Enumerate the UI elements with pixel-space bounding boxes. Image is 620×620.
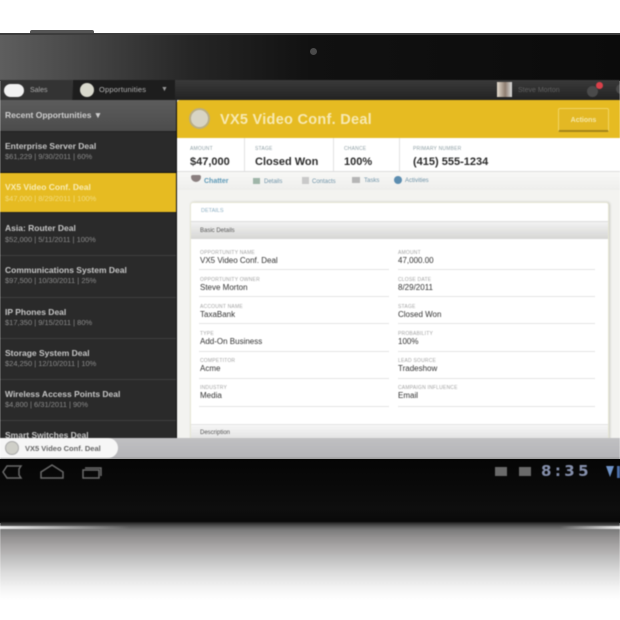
stat: amount	[190, 146, 230, 168]
icon: camera	[310, 48, 317, 55]
icon: settings	[616, 84, 620, 94]
icon: signal	[606, 465, 620, 479]
active tab	[0, 438, 118, 458]
section heading: Description	[200, 430, 230, 436]
item details: $61,229 | 9/30/2011 | 60%	[5, 152, 92, 161]
field: opportunity owner	[199, 273, 389, 297]
field label: OPPORTUNITY OWNER	[200, 277, 260, 283]
icon: activities	[394, 176, 402, 184]
field: industry	[199, 381, 389, 407]
icon: notification one	[495, 467, 507, 476]
field label: ACCOUNT NAME	[200, 304, 243, 310]
stat label: PRIMARY NUMBER	[413, 146, 461, 152]
basic details bar	[191, 221, 610, 239]
field label: PROBABILITY	[398, 331, 433, 337]
icon: back	[2, 464, 22, 480]
opportunities label: Opportunities	[99, 85, 146, 94]
main panel	[177, 100, 620, 439]
field value: 47,000.00	[398, 256, 434, 265]
field: amount	[398, 246, 595, 270]
actions button	[558, 108, 609, 132]
field: competitor	[199, 354, 389, 379]
icon: recent apps	[82, 466, 102, 480]
item: asia router	[4, 223, 96, 244]
item: communications system	[0, 255, 176, 297]
icon: chatter	[191, 175, 201, 182]
stats row	[177, 138, 620, 172]
field label: CLOSE DATE	[398, 277, 431, 283]
field value: 100%	[398, 337, 418, 346]
field value: Steve Morton	[200, 283, 248, 292]
stat: primary number	[399, 138, 519, 171]
item: smart switches	[0, 420, 176, 439]
icon: details	[253, 178, 260, 184]
field: account name	[199, 300, 389, 324]
field label: STAGE	[398, 304, 416, 310]
opportunities tab	[73, 80, 175, 100]
field value: Media	[200, 391, 222, 400]
field value: Tradeshow	[398, 364, 437, 373]
item details: $4,800 | 6/31/2011 | 90%	[5, 400, 88, 409]
item: wireless access points	[0, 379, 176, 420]
tab: details: Details	[264, 179, 282, 185]
dropdown arrow: ▼	[161, 86, 168, 93]
sidebar: opportunities list	[0, 100, 177, 439]
stat value: 100%	[344, 156, 372, 168]
item details: $24,250 | 12/10/2011 | 10%	[5, 359, 96, 368]
user name: Steve Morton	[518, 87, 560, 94]
field: type	[199, 327, 389, 352]
item title: Storage System Deal	[5, 348, 90, 358]
field: lead source	[398, 354, 595, 379]
sales tab	[0, 80, 72, 100]
reflection	[0, 522, 620, 602]
notification circle	[587, 86, 598, 97]
left highlight	[0, 526, 130, 529]
open tab strip	[0, 438, 620, 459]
details caption: DETAILS	[201, 208, 224, 214]
stat value: $47,000	[190, 156, 230, 168]
field value: 8/29/2011	[398, 283, 433, 292]
item title: VX5 Video Conf. Deal	[5, 182, 91, 192]
item details: $17,350 | 9/15/2011 | 80%	[5, 318, 92, 327]
field label: INDUSTRY	[200, 385, 227, 391]
sidebar heading: Recent Opportunities ▼	[5, 110, 102, 120]
stat value: Closed Won	[255, 156, 318, 168]
tab label: VX5 Video Conf. Deal	[25, 444, 101, 453]
stat label: CHANCE	[344, 146, 366, 152]
field: campaign influence	[398, 381, 595, 407]
field label: TYPE	[200, 331, 214, 337]
screen	[0, 80, 620, 459]
icon: home	[40, 464, 64, 480]
sidebar header	[0, 100, 176, 132]
item: enterprise server	[4, 141, 96, 161]
notification dot	[596, 82, 603, 89]
item title: IP Phones Deal	[5, 307, 66, 317]
icon: cloud	[4, 84, 24, 97]
field value: VX5 Video Conf. Deal	[200, 256, 278, 265]
field label: OPPORTUNITY NAME	[200, 250, 255, 256]
item details: $97,500 | 10/30/2011 | 25%	[5, 276, 96, 285]
icon: notification badge	[586, 81, 604, 98]
icon: opportunities coin	[80, 83, 94, 97]
item title: Asia: Router Deal	[5, 223, 76, 233]
top bezel	[0, 33, 620, 81]
stat label: STAGE	[255, 146, 273, 152]
actions label: Actions	[571, 117, 596, 124]
icon: notification two	[519, 467, 531, 476]
field: probability	[398, 327, 595, 352]
feed tabs	[177, 172, 620, 190]
user avatar	[497, 82, 512, 97]
item: ip phones	[0, 297, 176, 338]
clock: 8:35	[541, 462, 592, 480]
section heading: Basic Details	[200, 228, 235, 234]
field label: LEAD SOURCE	[398, 358, 436, 364]
item: storage system	[0, 338, 176, 379]
stat value: (415) 555-1234	[413, 156, 488, 168]
stat: chance	[333, 138, 399, 171]
icon: tasks	[352, 177, 360, 183]
field value: Add-On Business	[200, 337, 262, 346]
field label: COMPETITOR	[200, 358, 235, 364]
item title: Enterprise Server Deal	[5, 141, 96, 151]
icon: contacts	[302, 177, 309, 184]
item details: $52,000 | 5/11/2011 | 100%	[5, 235, 96, 244]
field: close date	[398, 273, 595, 297]
tab: chatter: Chatter	[204, 178, 229, 185]
item details: $47,000 | 8/29/2011 | 100%	[5, 194, 96, 203]
icon: deal coin	[189, 108, 210, 129]
deal header	[177, 100, 620, 138]
description bar	[191, 424, 610, 443]
field: opportunity name	[199, 246, 389, 270]
field value: Acme	[200, 364, 220, 373]
item: selected VX5 deal	[0, 172, 176, 213]
stat label: AMOUNT	[190, 146, 213, 152]
details card	[190, 202, 609, 442]
item title: Communications System Deal	[5, 265, 127, 275]
tab: tasks: Tasks	[364, 178, 379, 184]
system and lower bezel	[0, 459, 620, 523]
top navigation bar	[0, 80, 620, 100]
icon: tab coin	[5, 441, 19, 455]
field label: AMOUNT	[398, 250, 421, 256]
sales label: Sales	[30, 87, 48, 94]
stat: stage	[244, 138, 333, 171]
field: stage	[398, 300, 595, 324]
deal title: VX5 Video Conf. Deal	[220, 112, 372, 128]
field value: Email	[398, 391, 418, 400]
field value: Closed Won	[398, 310, 441, 319]
power button	[30, 30, 94, 33]
tab: activities: Activities	[405, 178, 429, 184]
right highlight	[560, 526, 620, 529]
field label: CAMPAIGN INFLUENCE	[398, 385, 458, 391]
tab: contacts: Contacts	[312, 179, 336, 185]
field value: TaxaBank	[200, 310, 235, 319]
item title: Wireless Access Points Deal	[5, 389, 120, 399]
